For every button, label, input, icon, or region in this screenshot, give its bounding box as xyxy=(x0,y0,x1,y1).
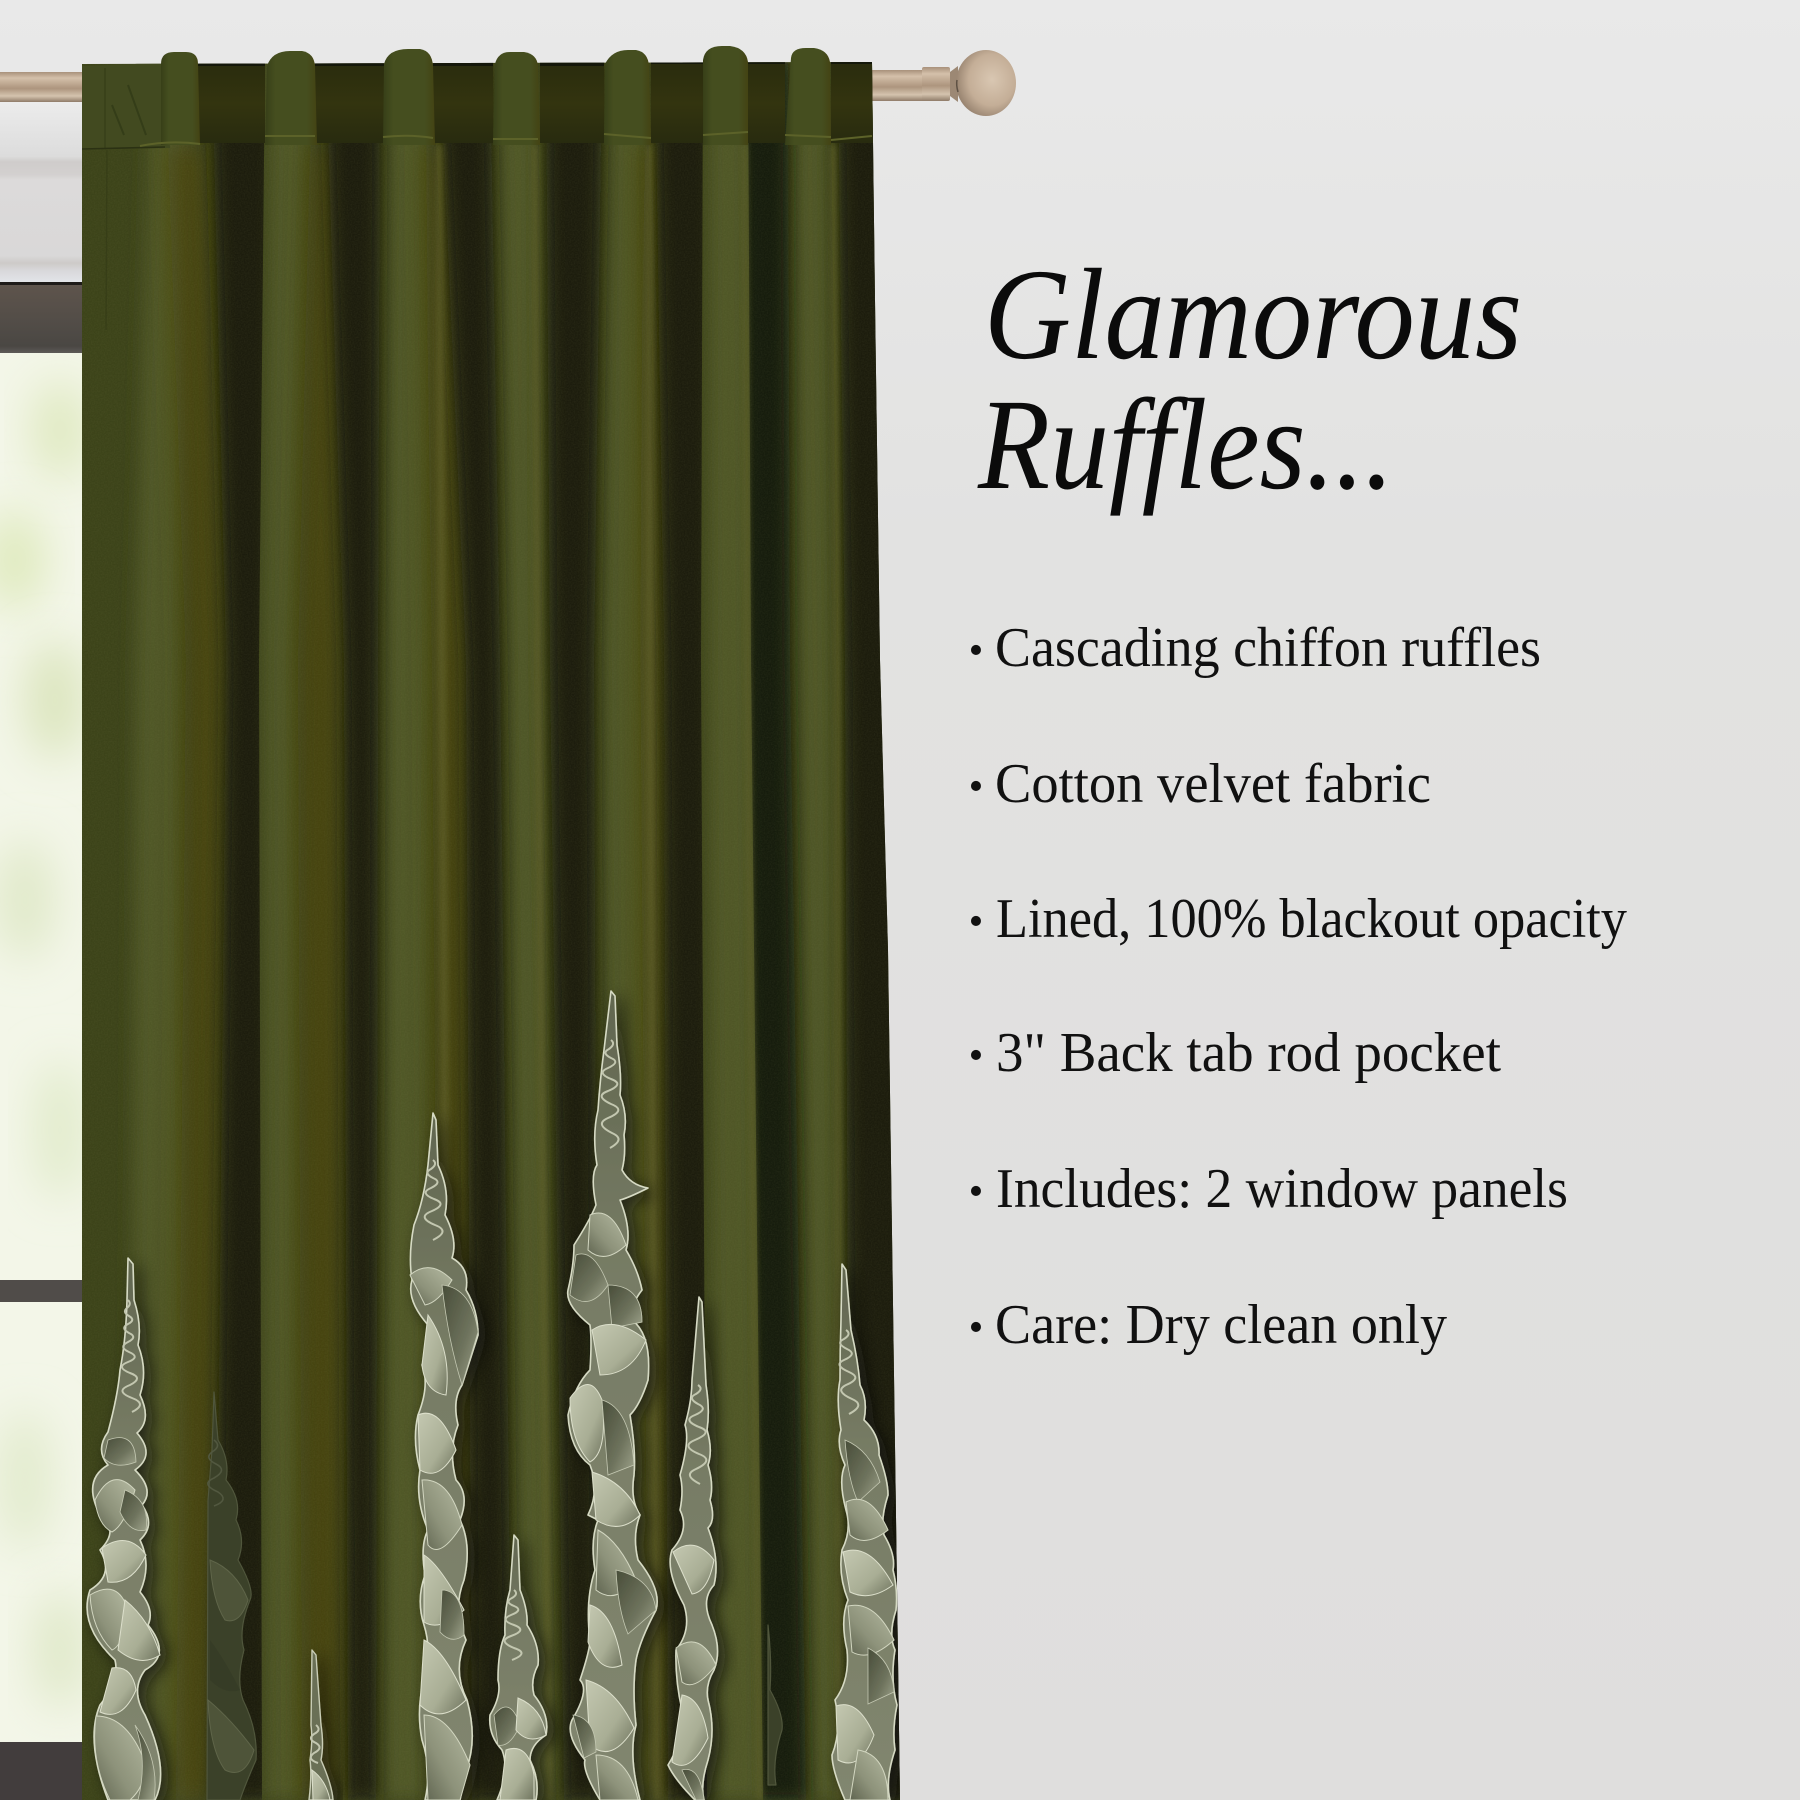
rod finial xyxy=(950,50,1016,116)
ruffle: centre-left tall xyxy=(410,1113,478,1800)
feature: lining: Lined, 100% blackout opacity xyxy=(996,888,1627,950)
title: Ruffles... xyxy=(977,373,1394,517)
ruffle: small centre xyxy=(490,1535,547,1800)
header band between tabs xyxy=(198,60,876,143)
window and trim behind curtain xyxy=(0,102,88,1800)
rod collar xyxy=(922,67,950,101)
velvet nap texture xyxy=(211,93,894,1798)
feature: rod pocket: 3" Back tab rod pocket xyxy=(996,1022,1501,1084)
feature: chiffon ruffles: Cascading chiffon ruffles xyxy=(995,617,1541,679)
dark fold shadows xyxy=(212,60,920,1800)
feature: fabric: • xyxy=(969,764,983,810)
curtain panel xyxy=(80,56,920,1800)
feature list xyxy=(969,617,1627,1356)
ruffle: centre tall xyxy=(568,991,657,1800)
rod pocket stitching xyxy=(140,132,872,146)
title xyxy=(977,243,1522,517)
warm fold bands xyxy=(168,145,672,1800)
feature: lining: • xyxy=(969,899,983,945)
feature: fabric: Cotton velvet fabric xyxy=(995,753,1431,815)
title: Glamorous xyxy=(984,243,1522,387)
velvet base xyxy=(80,60,910,1800)
feature: care: • xyxy=(969,1305,983,1351)
ruffle: dim sliver behind right fold xyxy=(768,1625,782,1785)
left header corner xyxy=(82,56,170,330)
feature: rod pocket: • xyxy=(969,1033,983,1079)
feature: chiffon ruffles: • xyxy=(969,628,983,674)
feature: includes: Includes: 2 window panels xyxy=(996,1158,1568,1220)
ruffle: small bottom centre-left xyxy=(309,1650,333,1800)
feature: includes: • xyxy=(969,1169,983,1215)
curtain rod xyxy=(0,50,1016,116)
ruffle: centre-right xyxy=(668,1297,718,1800)
lit velvet ridges xyxy=(130,60,838,1800)
ruffle: left xyxy=(87,1258,161,1800)
ruffle: far-left dim behind fold xyxy=(207,1392,256,1800)
back tabs xyxy=(140,46,872,146)
feature: care: Care: Dry clean only xyxy=(995,1294,1447,1356)
fold highlights xyxy=(436,145,842,1800)
ruffle: right xyxy=(832,1264,897,1800)
